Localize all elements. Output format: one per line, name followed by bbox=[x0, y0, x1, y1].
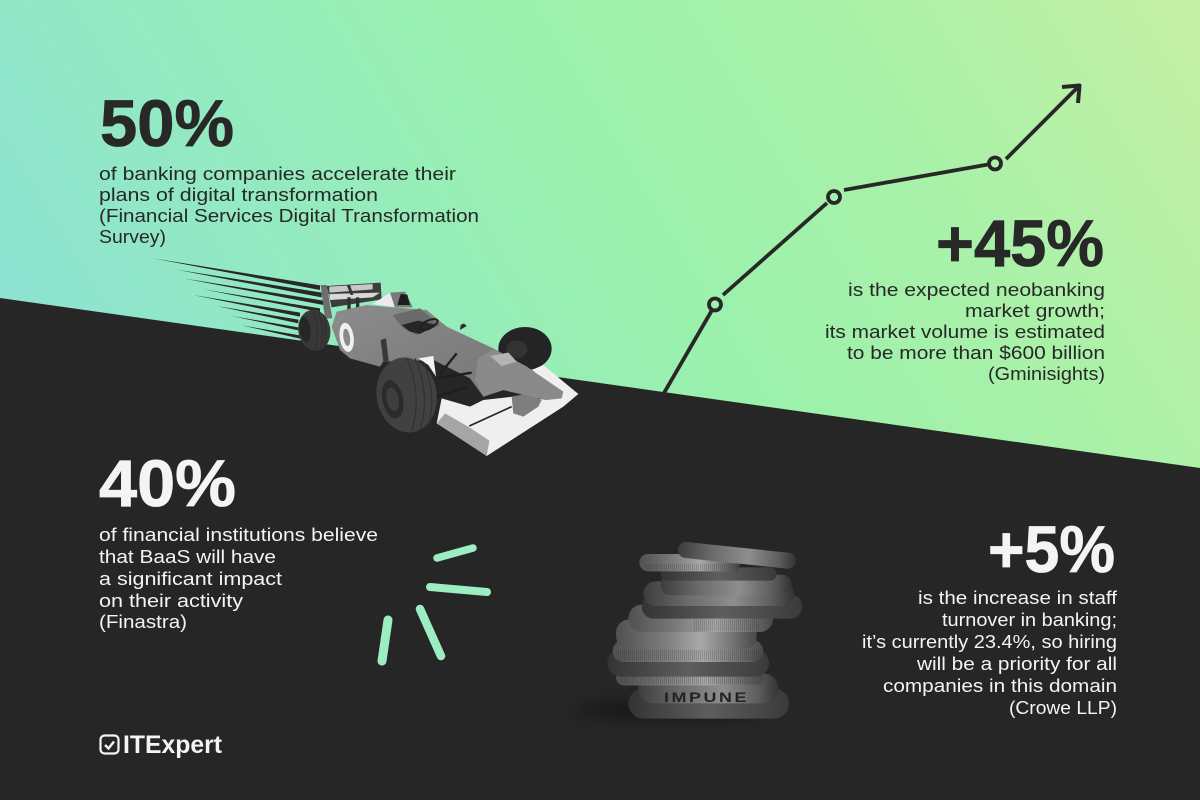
text: 50% description bbox=[99, 163, 479, 247]
text: +5% description: will be a priority for all bbox=[916, 653, 1117, 674]
stat block: 40% bbox=[99, 446, 378, 632]
text: +45% description bbox=[825, 279, 1105, 384]
rear near wheel bbox=[296, 308, 333, 353]
text: 40% description: (Finastra) bbox=[99, 611, 187, 632]
text: 50% description: Survey) bbox=[99, 226, 166, 247]
text: +5% description: turnover in banking; bbox=[942, 609, 1117, 630]
text: 50% description: (Financial Services Digital Transformation bbox=[99, 205, 479, 226]
text: +45% description: to be more than $600 billion bbox=[847, 342, 1105, 363]
background: dark diagonal lower area bbox=[0, 298, 1200, 800]
text: 40% description: a significant impact bbox=[99, 568, 282, 589]
text: 40% description: that BaaS will have bbox=[99, 546, 276, 567]
heading: +5%: +5% bbox=[988, 512, 1115, 586]
text: 50% description: plans of digital transformation bbox=[99, 184, 378, 205]
heading: +45%: +45% bbox=[936, 206, 1104, 280]
coin shadow bbox=[577, 700, 763, 720]
text: +5% description: companies in this domain bbox=[883, 675, 1117, 696]
stat block: +5% bbox=[862, 512, 1118, 718]
side pod and number disc bbox=[338, 322, 356, 353]
rear wing bbox=[321, 285, 332, 318]
text: +5% description: it’s currently 23.4%, so hiring bbox=[862, 631, 1117, 652]
logo wordmark: ITExpert bbox=[123, 731, 223, 759]
car body bbox=[332, 305, 563, 400]
front near wheel bbox=[371, 353, 443, 437]
text: +5% description: (Crowe LLP) bbox=[1009, 697, 1117, 718]
mirror bbox=[460, 323, 467, 330]
text: +45% description: its market volume is estimated bbox=[825, 321, 1105, 342]
illustration: stack of coins bbox=[577, 541, 802, 720]
text: +5% description bbox=[862, 587, 1118, 718]
stat block: 50% bbox=[99, 86, 479, 247]
text: +45% description: (Gminisights) bbox=[988, 363, 1105, 384]
text: 40% description: on their activity bbox=[99, 590, 244, 611]
cockpit bbox=[393, 308, 440, 335]
heading: 50%: 50% bbox=[100, 86, 234, 160]
text: +45% description: is the expected neobanking bbox=[848, 279, 1105, 300]
speed lines bbox=[153, 258, 323, 339]
text: 40% description: of financial institutions believe bbox=[99, 524, 378, 545]
logo: ITExpert bbox=[100, 731, 223, 759]
nose cone bbox=[475, 349, 563, 400]
illustration: racing car with speed lines bbox=[153, 258, 578, 456]
stat block: +45% bbox=[825, 206, 1105, 384]
text: 50% description: of banking companies accelerate their bbox=[99, 163, 456, 184]
text: 40% description bbox=[99, 524, 378, 632]
icon: green spark strokes bbox=[382, 548, 487, 661]
far front wheel bbox=[498, 327, 552, 370]
airbox bbox=[373, 293, 398, 307]
icon: check box bbox=[100, 736, 118, 754]
text: +45% description: market growth; bbox=[965, 300, 1105, 321]
front wing bbox=[437, 365, 578, 456]
line chart with arrow bbox=[664, 86, 1080, 393]
suspension arms bbox=[437, 353, 472, 397]
text: +5% description: is the increase in staff bbox=[918, 587, 1118, 608]
coin edge lettering: IMPUNE bbox=[664, 689, 749, 705]
heading: 40%: 40% bbox=[99, 446, 236, 520]
